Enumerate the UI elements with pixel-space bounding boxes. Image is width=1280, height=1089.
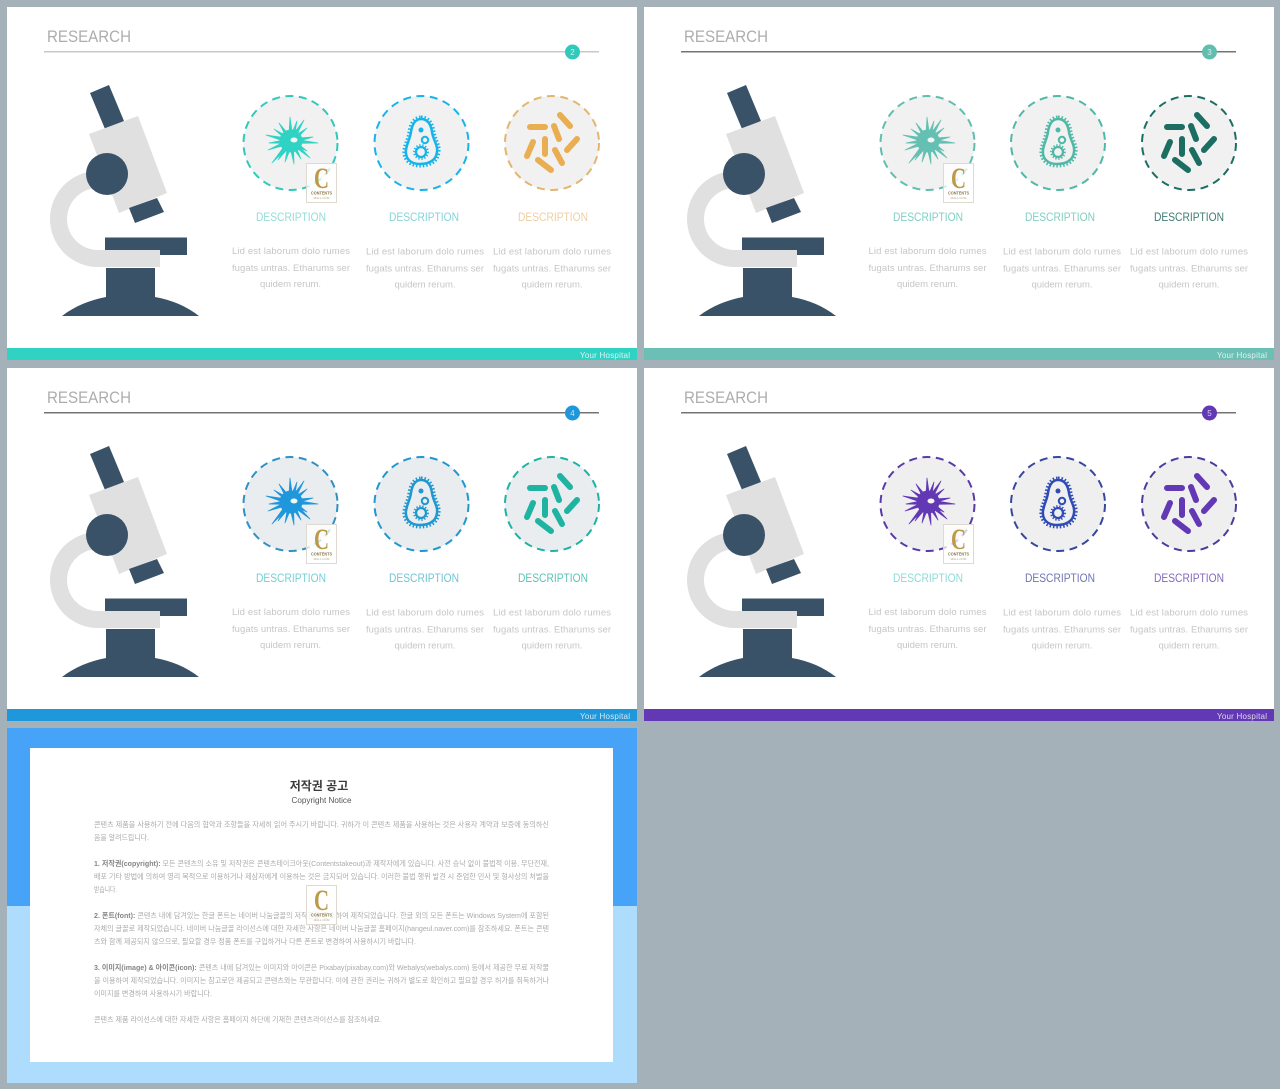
footer label: Your Hospital [1217, 712, 1267, 721]
column 1 text [232, 246, 350, 290]
panel: research slide 5 (purple) [644, 368, 1274, 721]
footer label: Your Hospital [1217, 351, 1267, 360]
column 2 caption: DESCRIPTION [389, 571, 459, 585]
heading: RESEARCH [47, 28, 131, 46]
column 1 text: fugats untras. Etharums ser [868, 263, 986, 274]
watermark [306, 162, 336, 202]
illustration: microscope [50, 85, 199, 316]
column 3 text: fugats untras. Etharums ser [1130, 624, 1248, 636]
icon: spiky microbe [880, 457, 974, 551]
column 3 text: fugats untras. Etharums ser [493, 264, 611, 274]
clause 3 image and icon: 3. 이미지(image) & 아이콘(icon): 콘텐츠 내에 담겨있는 이미지와 아이콘은 Pixabay(pixabay.com)와 Webalys(webalys.com) 등에서 제공한 무료 저작물 [94, 963, 549, 972]
column 1 text: fugats untras. Etharums ser [232, 263, 350, 274]
column 2 text: quidem rerum. [1032, 640, 1092, 652]
clause 2 font: 자체의 글꼴로 제작되었습니다. 네이버 나눔글꼴 라이선스에 대한 자세한 사항은 네이버 나눔글꼴 홈페이지(hangeul.naver.com)를 참조하세요. 폰트는 콘텐 [94, 924, 549, 933]
column 3 caption: DESCRIPTION [1154, 571, 1224, 585]
column 3 text: fugats untras. Etharums ser [493, 624, 611, 636]
column 3 text [1130, 608, 1248, 652]
page number badge: 3 [1207, 48, 1212, 57]
intro paragraph: 음을 알려드립니다. [94, 833, 149, 842]
clause 1 copyright [94, 859, 549, 894]
clause 1 copyright: 1. 저작권(copyright): 모든 콘텐츠의 소유 및 저작권은 콘텐츠테이크아웃(Contentstakeout)과 제작자에게 있습니다. 사전 승낙 없이 불법적 이용, 무단전재, [94, 859, 549, 868]
watermark [306, 884, 336, 924]
column 2 text [366, 608, 484, 652]
column 3 text: Lid est laborum dolo rumes [1130, 608, 1248, 618]
closing line: 콘텐츠 제품 라이선스에 대한 자세한 사항은 홈페이지 하단에 기재한 콘텐츠라이선스를 참조하세요. [94, 1015, 382, 1024]
column 2 text: quidem rerum. [394, 640, 456, 652]
column 1 text [868, 246, 987, 290]
column 3 text: Lid est laborum dolo rumes [1130, 246, 1248, 258]
notice subtitle: Copyright Notice [292, 795, 352, 805]
column 1 text: quidem rerum. [897, 640, 958, 651]
column 1 text [232, 607, 350, 651]
watermark [944, 523, 974, 564]
column 2 caption: DESCRIPTION [1025, 571, 1095, 585]
column 2 text: fugats untras. Etharums ser [366, 624, 484, 636]
illustration: microscope [50, 446, 199, 677]
page number badge [1202, 44, 1217, 60]
footer label: Your Hospital [580, 712, 630, 721]
column 3 text: quidem rerum. [522, 640, 582, 652]
intro paragraph [94, 820, 549, 842]
column 2 text [366, 246, 484, 290]
clause 2 font: 츠와 함께 제공되지 않으므로, 필요할 경우 정품 폰트를 구입하거나 다른 폰트로 변경하여 사용하시기 바랍니다. [94, 937, 416, 946]
column 1 caption: DESCRIPTION [256, 571, 326, 585]
heading: RESEARCH [684, 389, 768, 407]
clause 2 font: 2. 폰트(font): 콘텐츠 내에 담겨있는 한글 폰트는 네이버 나눔글꼴의 저작권을 준수하여 제작되었습니다. 한글 외의 모든 폰트는 Windows System에 포함된 [94, 911, 549, 920]
clause 3 image and icon: 을 이용하여 제작되었습니다. 이미지는 참고로만 제공되고 콘텐츠와는 무관합니다. 이에 관한 권리는 귀하가 별도로 확인하고 필요할 경우 허가를 취득하거나 [94, 976, 549, 985]
column 2 text: fugats untras. Etharums ser [366, 264, 484, 274]
footer bar [644, 348, 1274, 360]
column 1 text: fugats untras. Etharums ser [868, 624, 986, 635]
column 1 text: fugats untras. Etharums ser [232, 624, 350, 635]
column 3 text [493, 246, 611, 290]
column 1 text: Lid est laborum dolo rumes [868, 607, 987, 618]
heading: RESEARCH [684, 28, 768, 46]
footer label: Your Hospital [580, 351, 630, 360]
icon: bacteria rods [505, 96, 599, 190]
column 2 text: quidem rerum. [1032, 280, 1092, 290]
column 2 text [1003, 246, 1121, 290]
column 2 text: fugats untras. Etharums ser [1003, 264, 1121, 274]
column 3 text: quidem rerum. [522, 280, 582, 290]
column 3 caption: DESCRIPTION [1154, 210, 1224, 224]
page number badge: 5 [1207, 409, 1212, 418]
column 2 caption: DESCRIPTION [1025, 210, 1095, 224]
notice title: 저작권 공고 [290, 778, 348, 793]
icon: cell [374, 457, 468, 551]
watermark [306, 523, 336, 564]
illustration: microscope [687, 446, 836, 677]
column 2 text [1003, 608, 1121, 652]
illustration: microscope [687, 85, 836, 316]
clause 1 copyright: 받습니다. [94, 885, 117, 894]
page number badge [565, 44, 580, 60]
panel: copyright notice [7, 728, 637, 1083]
column 2 text: Lid est laborum dolo rumes [366, 246, 484, 258]
column 3 text: quidem rerum. [1158, 280, 1220, 290]
footer bar [644, 709, 1274, 721]
icon: bacteria rods [505, 457, 599, 551]
column 1 caption: DESCRIPTION [256, 210, 326, 224]
intro paragraph: 콘텐츠 제품을 사용하기 전에 다음의 협약과 조항들을 자세히 읽어 주시기 바랍니다. 귀하가 이 콘텐츠 제품을 사용하는 것은 사용자 계약과 보증에 동의하신 [94, 820, 549, 829]
column 1 caption: DESCRIPTION [893, 571, 963, 585]
notice sheet [30, 748, 613, 1062]
page number badge: 4 [570, 409, 575, 418]
footer bar [7, 709, 637, 721]
icon: spiky microbe [244, 96, 338, 190]
column 1 text: quidem rerum. [260, 279, 321, 290]
column 3 caption: DESCRIPTION [518, 571, 588, 585]
column 1 text: Lid est laborum dolo rumes [232, 246, 350, 257]
page number badge [1202, 406, 1217, 420]
column 2 text: Lid est laborum dolo rumes [366, 608, 484, 618]
column 2 caption: DESCRIPTION [389, 210, 459, 224]
column 2 text: fugats untras. Etharums ser [1003, 624, 1121, 636]
heading: RESEARCH [47, 389, 131, 407]
panel: research slide 4 (blue) [7, 368, 637, 721]
panel: research slide 2 (teal, blue, orange) [7, 7, 637, 360]
column 3 text: Lid est laborum dolo rumes [493, 246, 611, 258]
column 3 text [493, 608, 611, 652]
column 1 text: quidem rerum. [897, 279, 958, 290]
column 2 text: Lid est laborum dolo rumes [1003, 246, 1121, 258]
column 1 text [868, 607, 987, 651]
footer bar [7, 348, 637, 360]
column 1 text: quidem rerum. [260, 640, 321, 651]
icon: cell [374, 96, 468, 190]
icon: bacteria rods [1142, 457, 1236, 551]
column 2 text: Lid est laborum dolo rumes [1003, 608, 1121, 618]
page number badge [565, 406, 580, 420]
panel: research slide 3 (green) [644, 7, 1274, 360]
icon: cell [1011, 96, 1105, 190]
icon: bacteria rods [1142, 96, 1236, 190]
clause 1 copyright: 배포 기타 방법에 의하여 영리 목적으로 이용하거나 제삼자에게 이용하는 것은 금지되어 있습니다. 이러한 불법 행위 발견 시 준엄한 민사 및 형사상의 처벌을 [94, 872, 549, 881]
clause 2 font [94, 911, 549, 946]
column 3 text: fugats untras. Etharums ser [1130, 264, 1248, 274]
column 1 text: Lid est laborum dolo rumes [868, 246, 987, 257]
watermark [944, 162, 974, 202]
column 3 text: Lid est laborum dolo rumes [493, 608, 611, 618]
icon: spiky microbe [244, 457, 338, 551]
column 3 caption: DESCRIPTION [518, 210, 588, 224]
column 1 text: Lid est laborum dolo rumes [232, 607, 350, 618]
column 1 caption: DESCRIPTION [893, 210, 963, 224]
column 3 text [1130, 246, 1248, 290]
column 3 text: quidem rerum. [1158, 640, 1220, 652]
icon: cell [1011, 457, 1105, 551]
page number badge: 2 [570, 48, 575, 57]
icon: spiky microbe [880, 96, 974, 190]
clause 3 image and icon: 이미지를 변경하여 사용하시기 바랍니다. [94, 989, 212, 998]
clause 3 image and icon [94, 963, 549, 998]
column 2 text: quidem rerum. [394, 280, 456, 290]
